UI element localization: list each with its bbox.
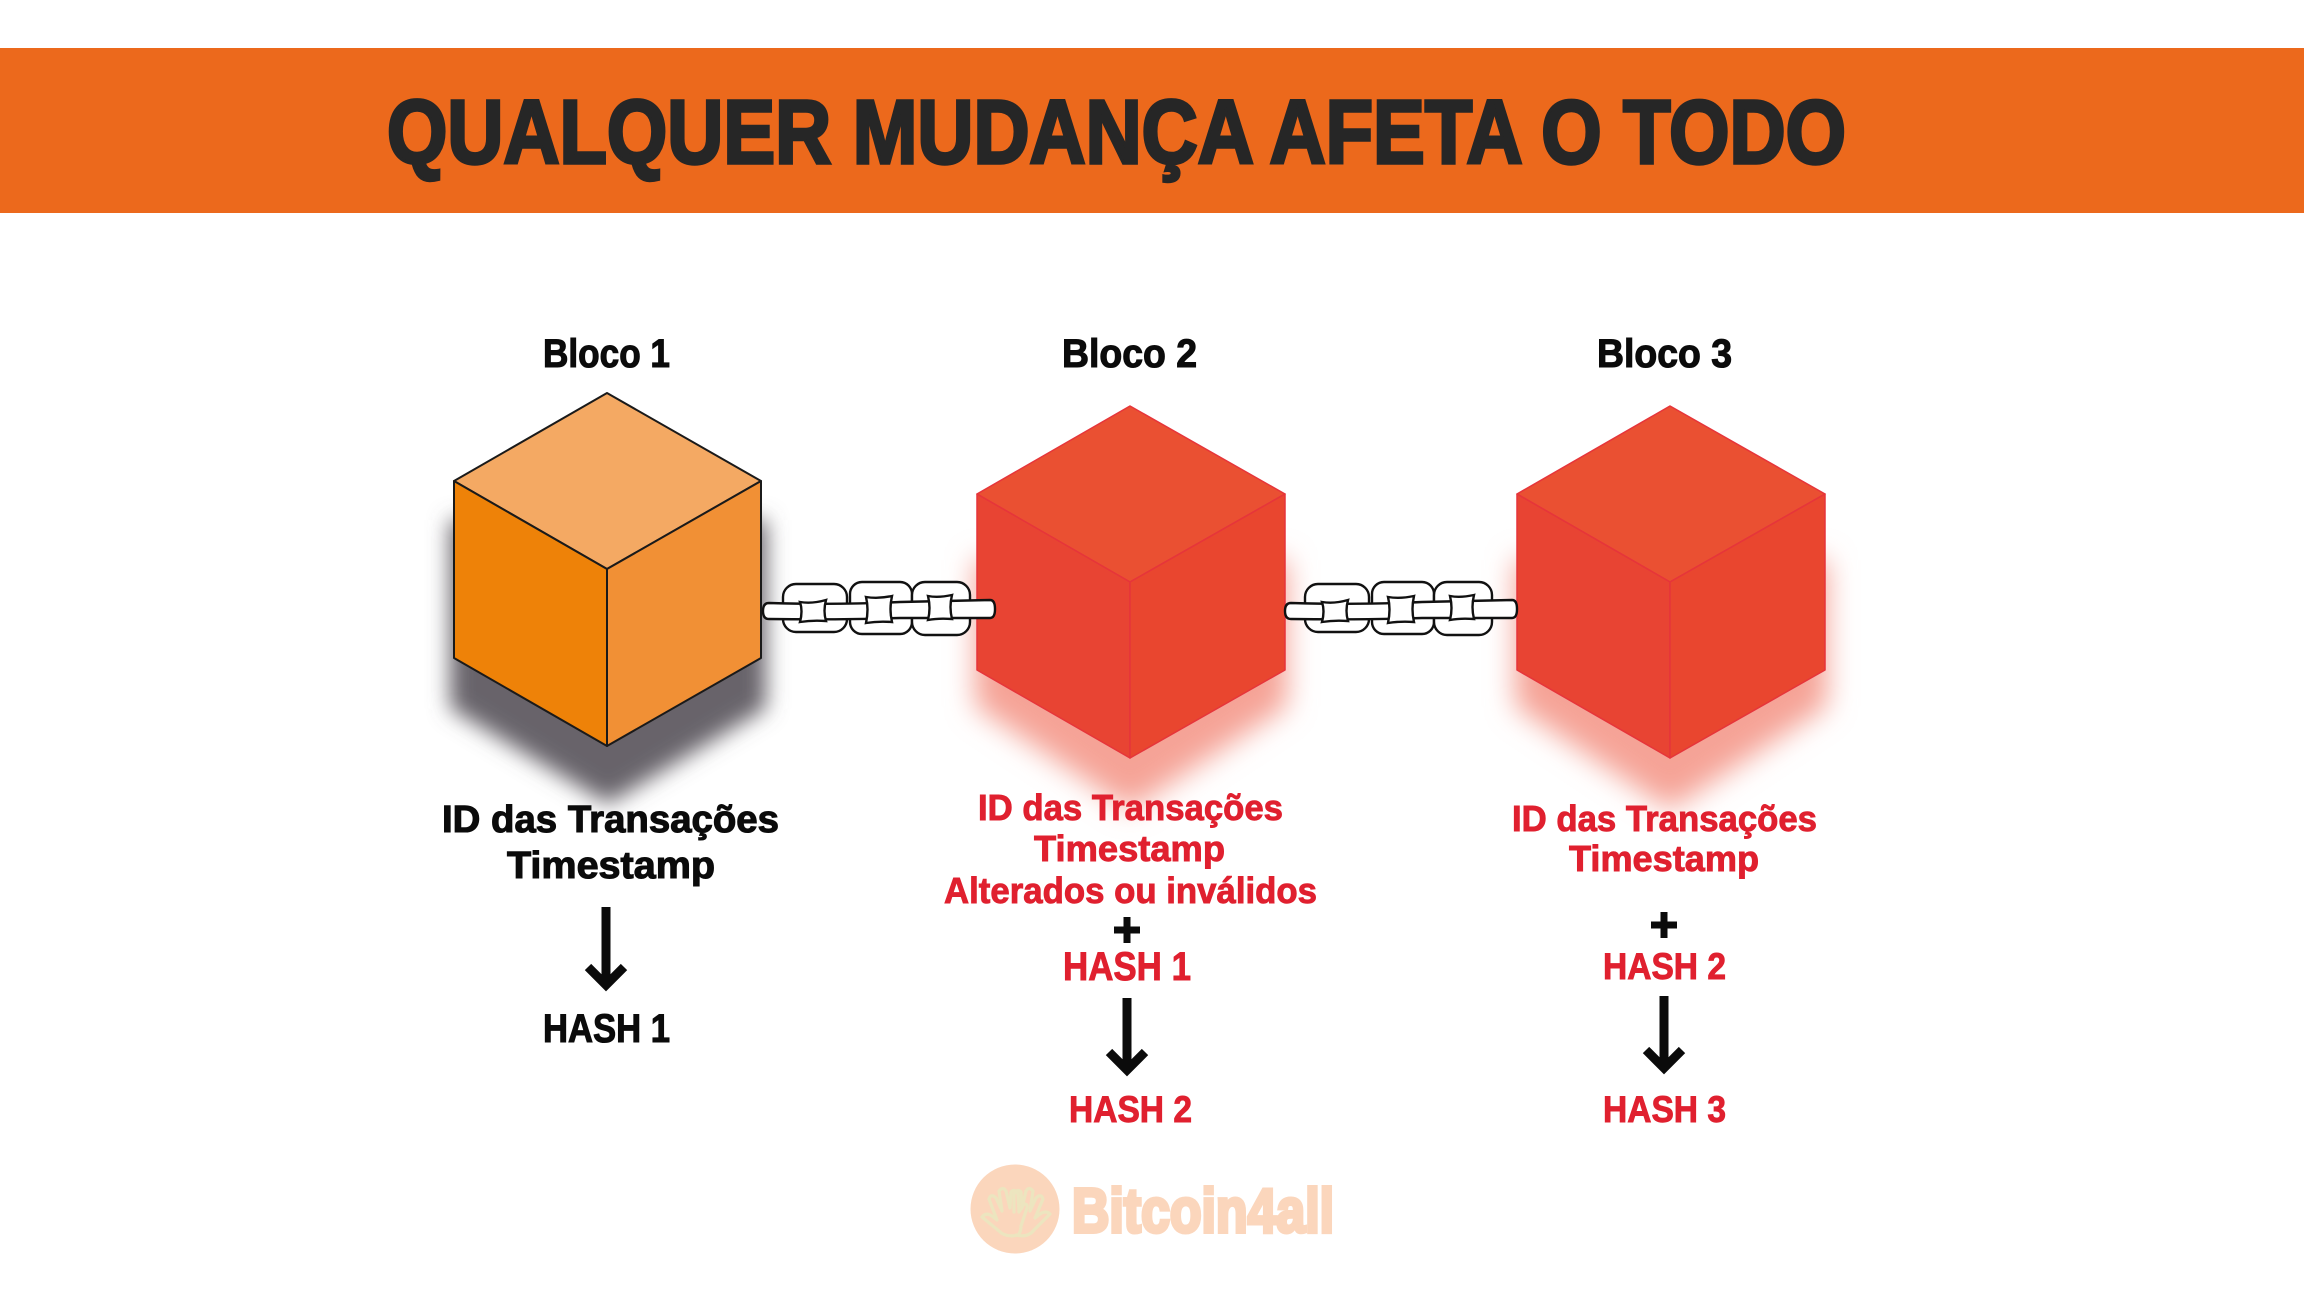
block 1 column	[442, 332, 779, 1051]
hash 1 label: HASH 1	[543, 1007, 670, 1051]
title banner	[0, 48, 2304, 213]
chain: block 2 to block 3	[1285, 582, 1517, 635]
block 1 data text: Timestamp	[507, 845, 715, 887]
block 3 data text	[1512, 798, 1817, 879]
block 2 cube glow	[975, 560, 1287, 810]
block 2 cube	[977, 406, 1285, 758]
block 3 cube	[1517, 406, 1825, 758]
block 3 data text: Timestamp	[1569, 838, 1759, 879]
logo: Bitcoin4all	[970, 1164, 1334, 1254]
block 3 data text: ID das Transações	[1512, 798, 1817, 839]
block 1 cube shadow	[450, 520, 766, 804]
block 1 data text: ID das Transações	[442, 799, 779, 841]
block 2 heading: Bloco 2	[1062, 332, 1197, 376]
block 2 data text: Timestamp	[1034, 828, 1225, 869]
block 3 heading: Bloco 3	[1597, 332, 1732, 376]
block 1 cube	[454, 393, 761, 746]
arrow: block 2 to hash 2	[1109, 998, 1145, 1070]
plus sign	[1651, 912, 1677, 938]
title: QUALQUER MUDANÇA AFETA O TODO	[387, 83, 1846, 183]
icon: two hands	[982, 1188, 1050, 1236]
hash 1 input label: HASH 1	[1063, 945, 1191, 989]
block 1 data text	[442, 799, 779, 887]
block 2 column	[944, 332, 1317, 1130]
block 3 column	[1512, 332, 1827, 1130]
block 3 cube glow	[1515, 560, 1827, 810]
plus sign	[1114, 917, 1140, 943]
logo circle	[970, 1164, 1060, 1254]
hash 3 label: HASH 3	[1603, 1089, 1726, 1130]
chain: block 1 to block 2	[763, 582, 995, 635]
logo wordmark: Bitcoin4all	[1072, 1177, 1334, 1246]
hash 2 input label: HASH 2	[1603, 946, 1726, 987]
block 1 heading: Bloco 1	[543, 332, 670, 376]
arrow: block 3 to hash 3	[1646, 996, 1682, 1068]
hash 2 output label: HASH 2	[1069, 1089, 1192, 1130]
block 2 data text	[944, 787, 1317, 911]
arrow: block 1 to hash 1	[588, 907, 624, 985]
block 2 data text: Alterados ou inválidos	[944, 870, 1317, 911]
block 2 data text: ID das Transações	[978, 787, 1283, 828]
